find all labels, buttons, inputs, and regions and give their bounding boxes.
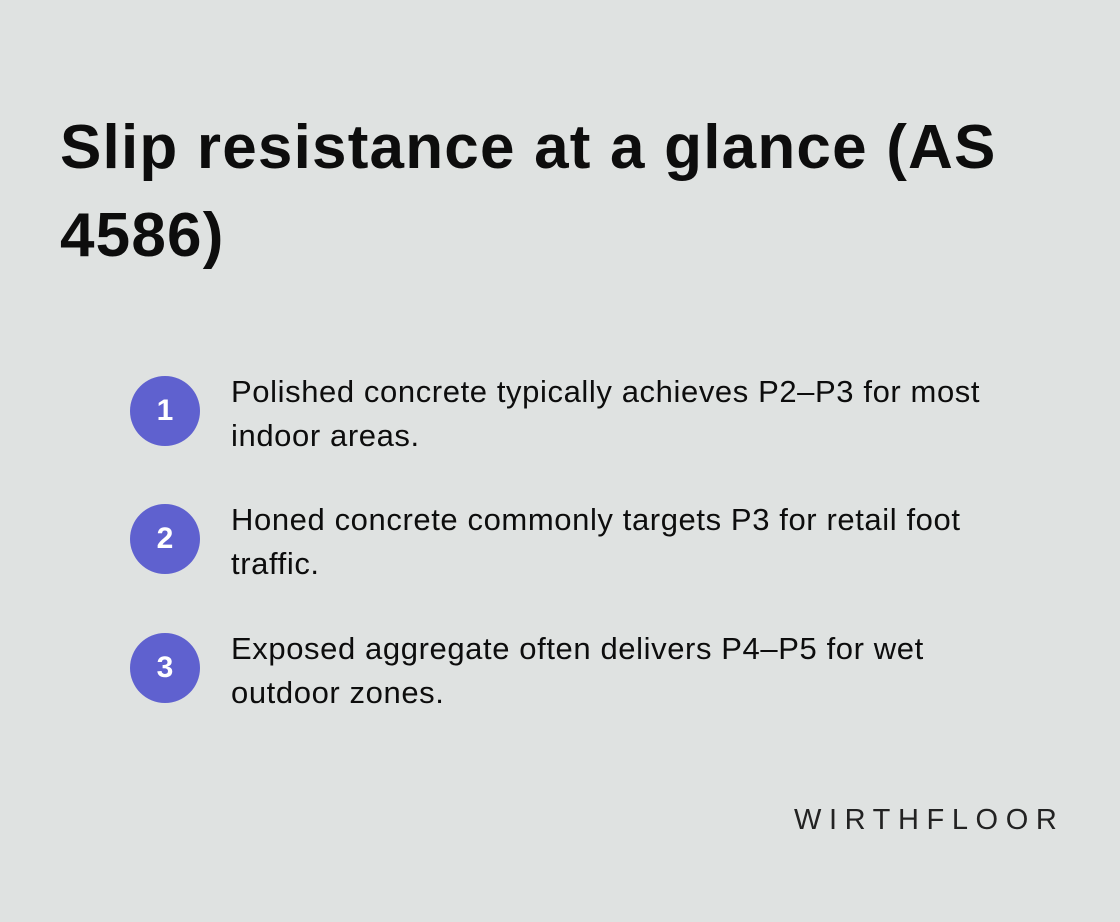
number badge 1 <box>130 376 200 446</box>
number badge 2 <box>130 504 200 574</box>
logo: WIRTHFLOOR <box>794 804 1064 836</box>
number badge 2: 2 <box>157 522 173 555</box>
text 2: traffic. <box>231 546 320 581</box>
item 2 <box>130 502 961 581</box>
text 2 <box>231 502 961 581</box>
number badge 3 <box>130 633 200 703</box>
text 3: outdoor zones. <box>231 675 444 710</box>
text 1: Polished concrete typically achieves P2–P3 for most <box>231 374 980 409</box>
text 3 <box>231 631 924 710</box>
number badge 1: 1 <box>157 394 173 427</box>
text 1 <box>231 374 980 453</box>
item 3 <box>130 631 924 710</box>
title <box>60 113 997 270</box>
text 1: indoor areas. <box>231 418 420 453</box>
number badge 3: 3 <box>157 651 173 684</box>
item 1 <box>130 374 980 453</box>
text 3: Exposed aggregate often delivers P4–P5 for wet <box>231 631 924 666</box>
text 2: Honed concrete commonly targets P3 for retail foot <box>231 502 961 537</box>
title: 4586) <box>60 201 225 270</box>
title: Slip resistance at a glance (AS <box>60 113 997 182</box>
